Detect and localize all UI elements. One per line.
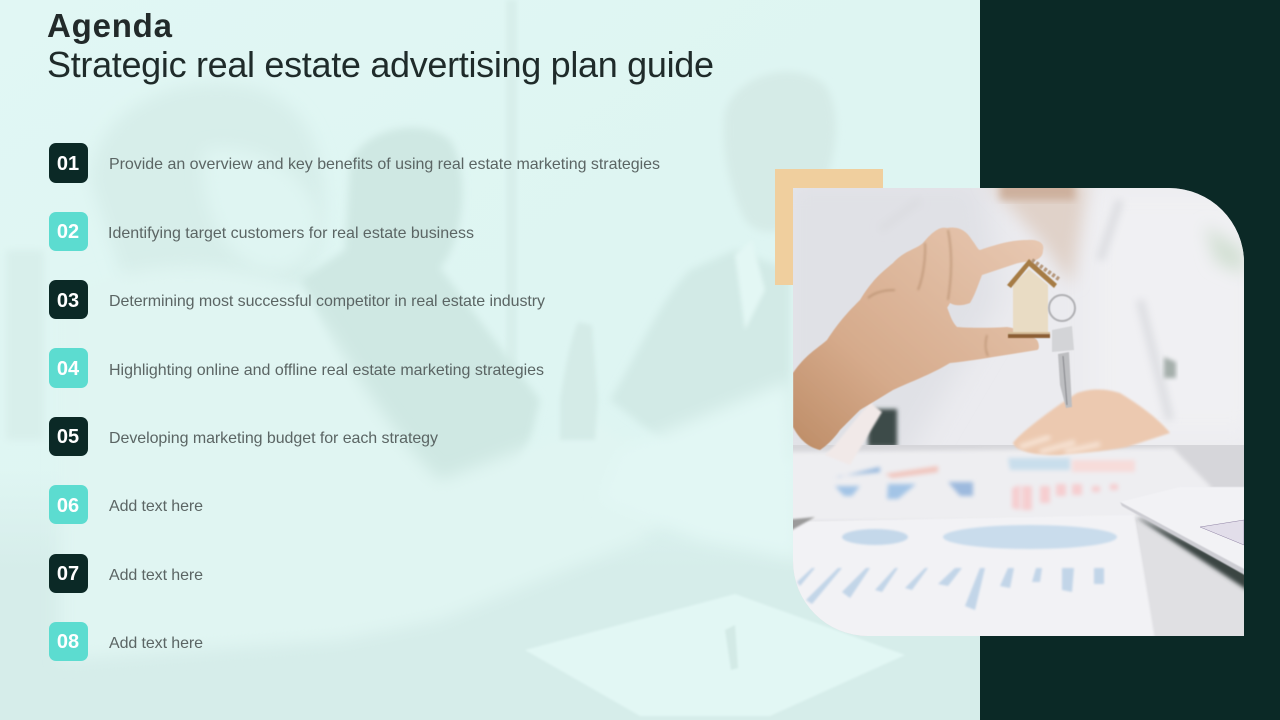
agenda item 02 (49, 212, 474, 251)
badge 02: 02 (57, 221, 79, 243)
icon: key and ring (1049, 295, 1075, 408)
badge 08 (49, 622, 88, 661)
badge 06: 06 (57, 495, 79, 517)
agenda item 01 (49, 143, 660, 183)
badge 05 (49, 417, 88, 456)
text 01: Provide an overview and key benefits of using real estate marketing strategies (109, 156, 660, 173)
text 08: Add text here (109, 635, 203, 652)
agenda item 06 (49, 485, 203, 524)
badge 05: 05 (57, 426, 79, 448)
photo: hand holding house keychain and key (780, 175, 1260, 640)
white cuff (828, 404, 883, 462)
badge 03 (49, 280, 88, 319)
badge 01: 01 (57, 153, 79, 175)
badge 04: 04 (57, 358, 80, 380)
icon: house keychain (1007, 259, 1060, 338)
agenda item 05 (49, 417, 438, 456)
badge 03: 03 (57, 290, 79, 312)
text 05: Developing marketing budget for each strategy (109, 430, 438, 447)
badge 07 (49, 554, 88, 593)
agenda item 03 (49, 280, 545, 319)
badge 06 (49, 485, 88, 524)
agenda item 07 (49, 554, 203, 593)
text 06: Add text here (109, 498, 203, 515)
hand on table (1013, 390, 1170, 455)
table and documents (780, 445, 1250, 640)
badge 01 (49, 143, 88, 183)
badge 02 (49, 212, 88, 251)
background: ghosted office photo (0, 0, 980, 720)
hand holding keychain (793, 228, 1043, 450)
agenda item 08 (49, 622, 203, 661)
agenda item 04 (49, 348, 544, 388)
text 07: Add text here (109, 567, 203, 584)
dark right panel (980, 0, 1280, 720)
text 03: Determining most successful competitor in real estate industry (109, 293, 545, 310)
subtitle: Strategic real estate advertising plan guide (47, 44, 714, 85)
badge 07: 07 (57, 563, 79, 585)
text 02: Identifying target customers for real estate business (108, 225, 474, 242)
title: Agenda: Agenda (47, 7, 173, 44)
text 04: Highlighting online and offline real estate marketing strategies (109, 362, 544, 379)
peach accent block (775, 169, 883, 285)
badge 08: 08 (57, 631, 79, 653)
blurred blue and pink chart marks (835, 458, 1135, 510)
badge 04 (49, 348, 88, 388)
